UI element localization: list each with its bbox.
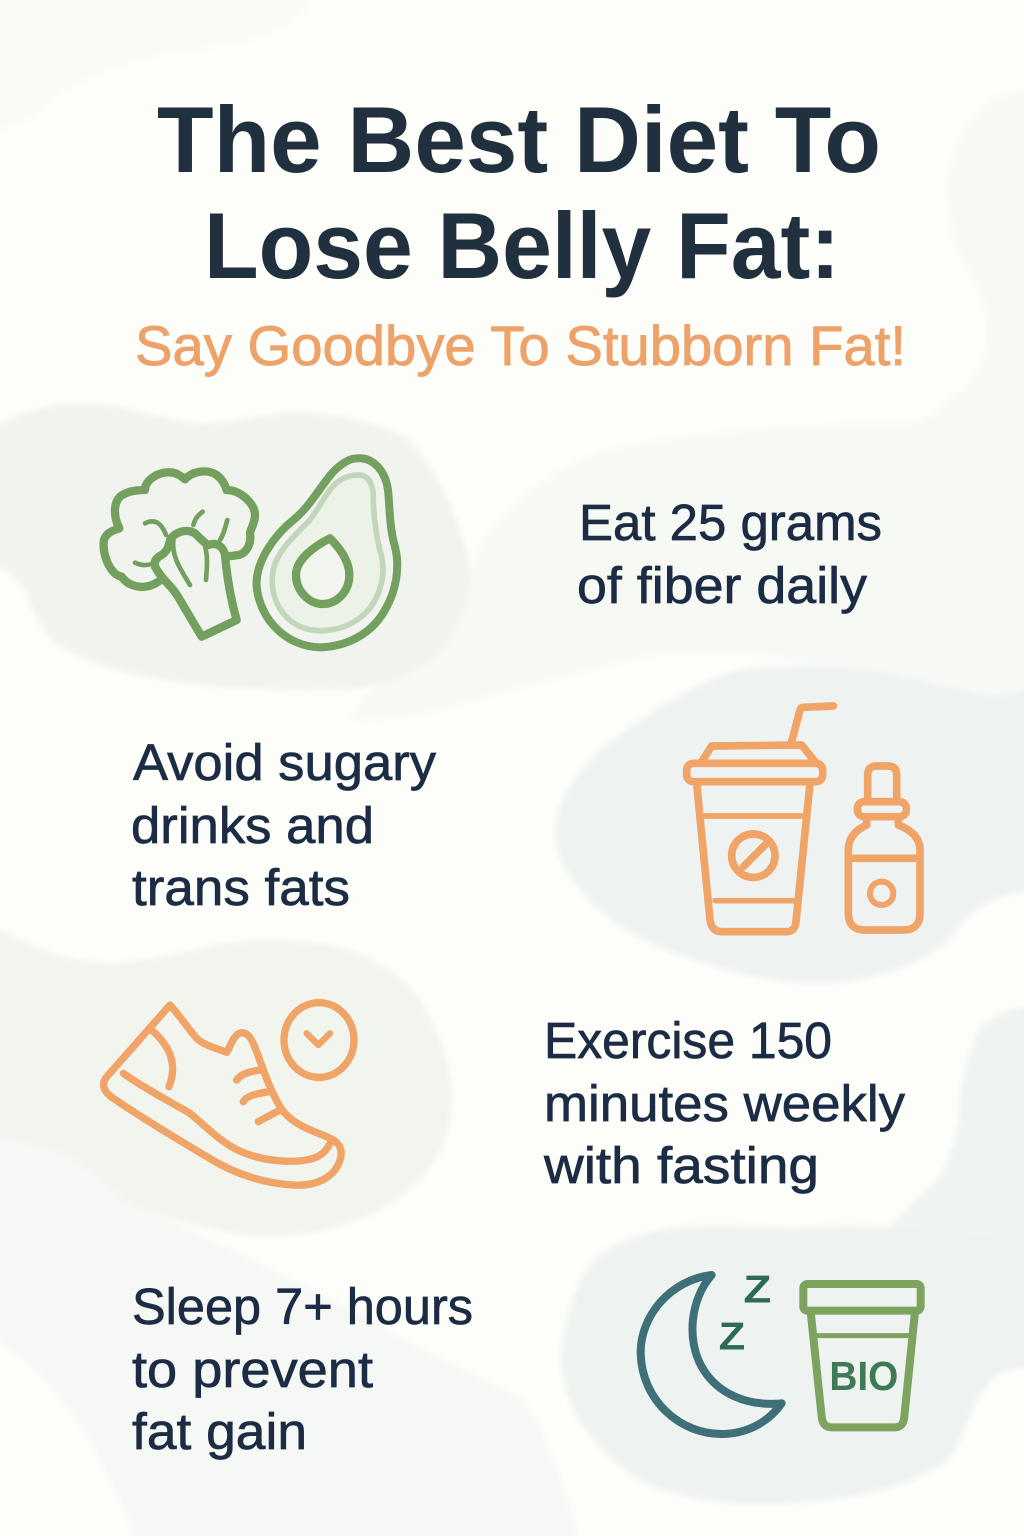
panel: drinks background blob	[555, 666, 1024, 983]
icon: cup and dropper bottle	[687, 706, 920, 932]
text: exercise: minutes weekly	[544, 1075, 906, 1132]
panel: sleep background blob	[562, 1226, 1024, 1504]
text: exercise: with fasting	[543, 1137, 819, 1194]
text: sleep: Sleep 7+ hours	[132, 1278, 473, 1335]
text: sugary drinks: trans fats	[132, 859, 350, 916]
icon: bio cup: BIO	[829, 1353, 898, 1399]
text: fiber	[577, 494, 882, 614]
icon: moon with z letters: Z	[719, 1315, 745, 1358]
icon: bio cup	[803, 1284, 921, 1427]
icon: dropper bottle	[848, 766, 920, 930]
icon: shoe	[104, 1005, 341, 1185]
text: exercise	[543, 1012, 906, 1194]
text: sugary drinks	[131, 734, 437, 916]
icon: moon with z letters	[641, 1269, 782, 1434]
text: sugary drinks: drinks and	[131, 797, 374, 854]
text: sleep	[132, 1278, 473, 1460]
icon: broccoli	[104, 471, 255, 637]
subtitle: Say Goodbye To Stubborn Fat!	[135, 314, 906, 377]
panel: fiber background blob	[0, 403, 470, 690]
title: Lose Belly Fat:	[204, 193, 840, 298]
title: The Best Diet To	[157, 87, 881, 192]
icon: broccoli and avocado	[104, 458, 397, 647]
icon: timer	[284, 1003, 354, 1077]
text: exercise: Exercise 150	[544, 1012, 832, 1069]
text: fiber: Eat 25 grams	[579, 494, 882, 551]
icon: moon with z letters: Z	[743, 1269, 771, 1312]
text: sleep: fat gain	[132, 1403, 307, 1460]
title	[157, 87, 881, 298]
text: fiber: of fiber daily	[577, 557, 868, 614]
panel: exercise background blob	[0, 915, 452, 1237]
icon: drink cup	[687, 706, 833, 932]
text: sugary drinks: Avoid sugary	[133, 734, 437, 791]
text: sleep: to prevent	[132, 1341, 373, 1398]
icon: moon and bio cup	[641, 1269, 921, 1434]
icon: avocado	[257, 458, 397, 647]
icon: running shoe with timer	[104, 1003, 354, 1185]
